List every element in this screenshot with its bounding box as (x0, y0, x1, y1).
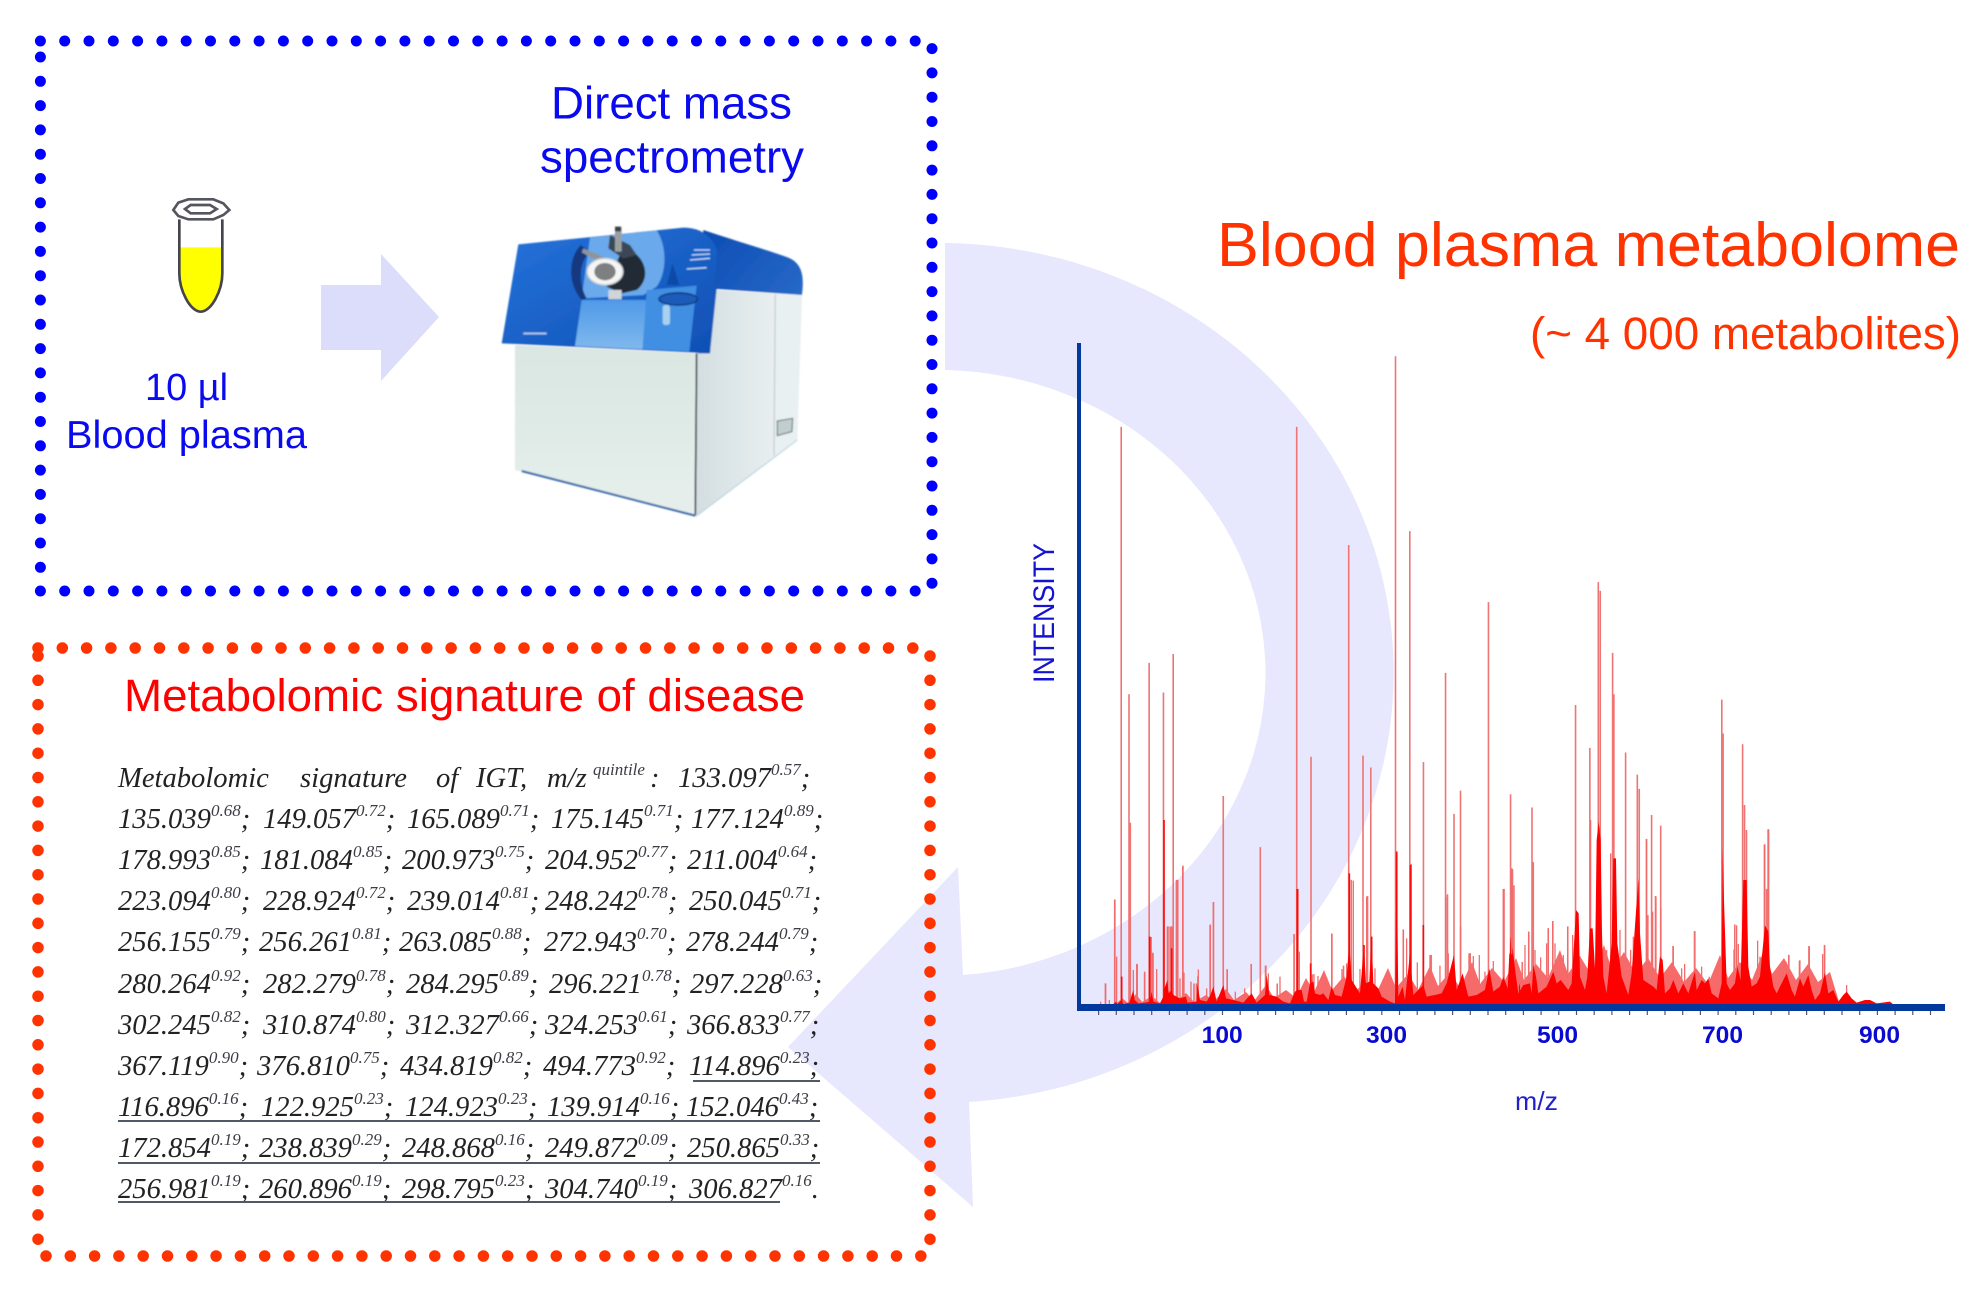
text block: m/z list: ; (810, 1010, 819, 1041)
text block: m/z list: 282.279 (263, 969, 356, 1000)
x axis tick labels: 300 (1366, 1022, 1407, 1049)
text block: m/z list: : (650, 763, 660, 794)
text block: m/z list: ; (530, 886, 539, 917)
text block: m/z list: ; (809, 927, 818, 958)
heading: direct mass spectrometry (540, 78, 804, 182)
text block: m/z list: 296.221 (549, 969, 642, 1000)
text block: m/z list: 124.923 (405, 1092, 498, 1123)
text block: m/z list: 239.014 (407, 886, 500, 917)
text block: m/z list: 0.78 (356, 966, 386, 985)
text block: m/z list: ; (670, 1092, 679, 1123)
text block: m/z list: 0.57 (771, 760, 802, 779)
x axis tick labels: 900 (1859, 1022, 1900, 1049)
text block: m/z list: 177.124 (691, 804, 784, 835)
text block: m/z list: 0.89 (499, 966, 529, 985)
text block: m/z list: 0.80 (211, 883, 241, 902)
panel: metabolomic signature (38, 648, 930, 1256)
text block: m/z list: 0.19 (638, 1171, 668, 1190)
text block: m/z list: 0.16 (209, 1089, 239, 1108)
text block: m/z list: ; (525, 845, 534, 876)
text block: m/z list: of (436, 763, 462, 794)
label: sample volume: Blood plasma (66, 414, 307, 457)
text block: m/z list: ; (241, 845, 250, 876)
text block: m/z list: . (812, 1174, 819, 1205)
text block: m/z list: ; (809, 1092, 818, 1123)
spectrum noise floor (1115, 945, 1840, 1005)
text block: m/z list: 0.81 (500, 883, 530, 902)
text block: m/z list: 278.244 (686, 927, 779, 958)
text block: m/z list: ; (382, 1133, 391, 1164)
text block: m/z list: ; (808, 845, 817, 876)
text block: m/z list: 0.85 (211, 842, 241, 861)
text block: m/z list: ; (810, 1133, 819, 1164)
text block: m/z list: 0.75 (350, 1048, 380, 1067)
text block: m/z list: 223.094 (118, 886, 211, 917)
underlines: negative markers (118, 1081, 820, 1202)
text block: m/z list: ; (386, 969, 395, 1000)
text block: m/z list: ; (241, 927, 250, 958)
text block: m/z list: 0.19 (352, 1171, 382, 1190)
text block: m/z list: 0.77 (780, 1007, 811, 1026)
text block: m/z list: 211.004 (687, 845, 778, 876)
title: blood plasma metabolome: Blood plasma metabolome (1217, 211, 1960, 280)
text block: m/z list: 0.66 (499, 1007, 529, 1026)
text block: m/z list: 272.943 (544, 927, 637, 958)
text block: m/z list: 263.085 (399, 927, 492, 958)
text block: m/z list: 0.72 (356, 883, 386, 902)
text block: m/z list: 366.833 (686, 1010, 780, 1041)
text block: m/z list: ; (529, 969, 538, 1000)
text block: m/z list: ; (668, 1010, 677, 1041)
text block: m/z list: ; (386, 804, 395, 835)
x axis tick labels: 100 (1202, 1022, 1243, 1049)
text block: m/z list: ; (384, 1092, 393, 1123)
text block: m/z list: ; (813, 969, 822, 1000)
text block: m/z list: 0.19 (211, 1130, 241, 1149)
text block: m/z list: ; (812, 886, 821, 917)
text block: m/z list: signature (300, 763, 407, 794)
y axis label: INTENSITY (1028, 543, 1061, 683)
text block: m/z list: 0.23 (498, 1089, 528, 1108)
text block: m/z list: 149.057 (263, 804, 358, 835)
text block: m/z list: 238.839 (259, 1133, 352, 1164)
text block: m/z list: ; (241, 1174, 250, 1205)
text block: m/z list: 0.71 (644, 801, 674, 820)
chart: mass spectrum (1028, 343, 1945, 1116)
text block: m/z list: 249.872 (545, 1133, 638, 1164)
text block: m/z list: 0.72 (356, 801, 386, 820)
text block: m/z list: 0.89 (784, 801, 814, 820)
text block: m/z list: 152.046 (686, 1092, 780, 1123)
x axis label: m/z (1515, 1086, 1558, 1116)
text block: m/z list: ; (380, 1051, 389, 1082)
spectrum high-mass region (1500, 820, 1893, 1004)
text block: m/z list: 306.827 (688, 1174, 784, 1205)
text block: m/z list: ; (529, 1010, 538, 1041)
text block: m/z list: 228.924 (263, 886, 356, 917)
spectrum tall peaks (1106, 356, 1824, 1005)
text block: m/z list: 0.82 (493, 1048, 523, 1067)
y axis (1077, 343, 1081, 1010)
text block: m/z list: 181.084 (260, 845, 353, 876)
text block: m/z list: 0.23 (354, 1089, 384, 1108)
text block: m/z list: ; (241, 804, 250, 835)
text block: m/z list: ; (382, 1174, 391, 1205)
text block: m/z list: 0.92 (636, 1048, 666, 1067)
text block: m/z list: 310.874 (262, 1010, 356, 1041)
text block: m/z list: 0.85 (353, 842, 383, 861)
text block: m/z list: IGT, (475, 763, 527, 794)
text block: m/z list: 0.63 (783, 966, 813, 985)
text block: m/z list: 302.245 (117, 1010, 211, 1041)
x axis ticks (1098, 1011, 1945, 1015)
text block: m/z list (117, 760, 823, 1205)
text block: m/z list: ; (667, 927, 676, 958)
text block: m/z list: ; (668, 1174, 677, 1205)
text block: m/z list: ; (528, 1092, 537, 1123)
text block: m/z list: ; (386, 886, 395, 917)
text block: m/z list: ; (525, 1133, 534, 1164)
icon: mass spectrometer instrument (502, 227, 803, 517)
text block: m/z list: ; (386, 1010, 395, 1041)
text block: m/z list: ; (810, 1051, 819, 1082)
text block: m/z list: 175.145 (551, 804, 644, 835)
x axis (1077, 1004, 1945, 1011)
heading: metabolomic signature of disease: Metabolomic signature of disease (124, 670, 805, 721)
text block: m/z list: 376.810 (256, 1051, 350, 1082)
text block: m/z list: 256.261 (259, 927, 352, 958)
text block: m/z list: 200.973 (402, 845, 495, 876)
text block: m/z list: 248.868 (402, 1133, 495, 1164)
text block: m/z list: 0.78 (642, 966, 672, 985)
text block: m/z list: ; (239, 1051, 248, 1082)
text block: m/z list: 178.993 (118, 845, 211, 876)
arrow: sample to instrument (321, 254, 439, 381)
text block: m/z list: 0.16 (495, 1130, 525, 1149)
text block: m/z list: ; (674, 804, 683, 835)
text block: m/z list: m/z (547, 763, 587, 794)
text block: m/z list: 0.88 (492, 924, 522, 943)
text block: m/z list: 0.61 (638, 1007, 668, 1026)
text block: m/z list: 256.155 (118, 927, 211, 958)
text block: m/z list: 324.253 (544, 1010, 638, 1041)
text block: m/z list: ; (672, 969, 681, 1000)
text block: m/z list: 172.854 (118, 1133, 211, 1164)
text block: m/z list: 116.896 (118, 1092, 210, 1123)
text block: m/z list: 0.78 (638, 883, 668, 902)
text block: m/z list: ; (525, 1174, 534, 1205)
text block: m/z list: 434.819 (400, 1051, 493, 1082)
text block: m/z list: 165.089 (407, 804, 500, 835)
spectrum low-mass region (1080, 820, 1520, 1005)
text block: m/z list: 248.242 (545, 886, 638, 917)
text block: m/z list: 256.981 (118, 1174, 211, 1205)
text block: m/z list: ; (522, 927, 531, 958)
dotted blue border (40, 41, 932, 591)
text block: m/z list: 0.09 (638, 1130, 668, 1149)
text block: m/z list: 0.68 (211, 801, 241, 820)
text block: m/z list: 284.295 (406, 969, 499, 1000)
text block: m/z list: quintile (593, 760, 645, 779)
text block: m/z list: 0.71 (782, 883, 812, 902)
text block: m/z list: 0.16 (640, 1089, 670, 1108)
text block: m/z list: 0.29 (352, 1130, 382, 1149)
panel: direct mass spectrometry (40, 41, 932, 591)
text block: m/z list: 0.90 (209, 1048, 239, 1067)
label: sample volume (66, 367, 307, 457)
text block: m/z list: ; (814, 804, 823, 835)
text block: m/z list: 0.33 (780, 1130, 810, 1149)
text block: m/z list: 494.773 (543, 1051, 636, 1082)
text block: m/z list: ; (668, 1133, 677, 1164)
icon: sample tube (173, 199, 229, 312)
text block: m/z list: 367.119 (117, 1051, 209, 1082)
text block: m/z list: 0.80 (356, 1007, 386, 1026)
text block: m/z list: 0.82 (211, 1007, 241, 1026)
text block: m/z list: 0.70 (637, 924, 667, 943)
text block: m/z list: ; (241, 969, 250, 1000)
text block: m/z list: 0.43 (779, 1089, 809, 1108)
x axis tick labels: 700 (1702, 1022, 1743, 1049)
text block: m/z list: 304.740 (544, 1174, 638, 1205)
text block: m/z list: Metabolomic (117, 763, 269, 794)
curved arrow: spectrum to signature (788, 243, 1394, 1207)
label: sample volume: 10 µl (145, 367, 228, 409)
text block: m/z list: ; (241, 1133, 250, 1164)
text block: m/z list: 0.81 (352, 924, 382, 943)
text block: m/z list: ; (239, 1092, 248, 1123)
text block: m/z list: ; (382, 927, 391, 958)
text block: m/z list: 250.865 (687, 1133, 780, 1164)
text block: m/z list: 0.16 (782, 1171, 812, 1190)
text block: m/z list: 0.19 (211, 1171, 241, 1190)
text block: m/z list: 204.952 (545, 845, 638, 876)
heading: direct mass spectrometry: spectrometry (540, 132, 804, 182)
text block: m/z list: 250.045 (689, 886, 782, 917)
text block: m/z list: 260.896 (259, 1174, 353, 1205)
text block: m/z list: 0.23 (780, 1048, 810, 1067)
text block: m/z list: ; (383, 845, 392, 876)
text block: m/z list: 114.896 (689, 1051, 781, 1082)
text block: m/z list: ; (666, 1051, 675, 1082)
text block: m/z list: 280.264 (118, 969, 211, 1000)
text block: m/z list: ; (523, 1051, 532, 1082)
text block: m/z list: 0.77 (638, 842, 669, 861)
text block: m/z list: 298.795 (402, 1174, 495, 1205)
text block: m/z list: 312.327 (405, 1010, 501, 1041)
text block: m/z list: 0.64 (778, 842, 808, 861)
text block: m/z list: ; (801, 763, 810, 794)
text block: m/z list: 0.79 (211, 924, 241, 943)
text block: m/z list: ; (668, 886, 677, 917)
text block: m/z list: 135.039 (118, 804, 211, 835)
x axis tick labels (1202, 1022, 1900, 1049)
text block: m/z list: ; (241, 886, 250, 917)
text block: m/z list: 0.23 (495, 1171, 525, 1190)
text block: m/z list: 139.914 (547, 1092, 640, 1123)
text block: m/z list: 297.228 (690, 969, 783, 1000)
text block: m/z list: 122.925 (261, 1092, 354, 1123)
subtitle: metabolite count: (~ 4 000 metabolites) (1530, 308, 1961, 359)
x axis tick labels: 500 (1537, 1022, 1578, 1049)
text block: m/z list: 0.92 (211, 966, 241, 985)
dotted red border (38, 648, 930, 1256)
text block: m/z list: 0.75 (495, 842, 525, 861)
text block: m/z list: ; (668, 845, 677, 876)
heading: direct mass spectrometry: Direct mass (551, 78, 792, 128)
text block: m/z list: 0.71 (500, 801, 530, 820)
text block: m/z list: ; (530, 804, 539, 835)
text block: m/z list: 133.097 (678, 763, 773, 794)
text block: m/z list: ; (241, 1010, 250, 1041)
text block: m/z list: 0.79 (779, 924, 809, 943)
